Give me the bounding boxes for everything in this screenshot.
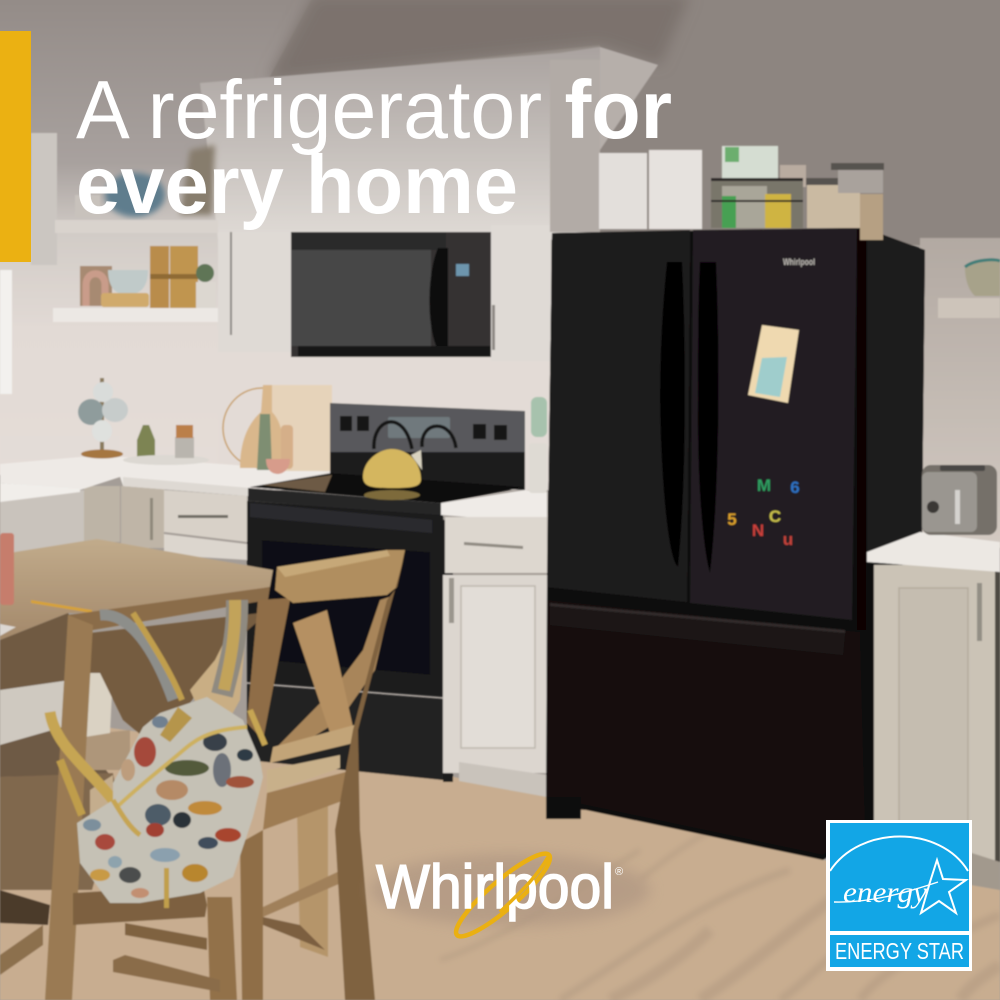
brace A (277, 596, 392, 747)
wall shelf (938, 298, 1000, 318)
paper (0, 624, 16, 636)
stretcher (263, 867, 348, 917)
registered mark: ® (615, 866, 623, 878)
swash (834, 882, 938, 902)
basket (101, 293, 149, 307)
magnets: M (757, 476, 771, 495)
stretchers (125, 923, 207, 950)
right lower cabinet (441, 397, 547, 797)
counter items (78, 378, 332, 474)
dining table (0, 533, 273, 777)
backsplash wall (218, 320, 550, 490)
seat rail (73, 885, 207, 925)
wall ledge (0, 436, 120, 460)
left door (547, 230, 690, 602)
bottom shelf (53, 308, 218, 322)
mug tree (100, 378, 104, 452)
wire basket (711, 180, 803, 228)
right side counter and cabinet (867, 260, 1000, 890)
left stretcher (0, 925, 43, 975)
rainbow (80, 266, 112, 306)
strap left (100, 615, 173, 700)
crown corner (600, 47, 658, 150)
counter left (0, 457, 332, 502)
pepper mill (257, 414, 272, 470)
top shelf (55, 220, 218, 233)
plant (196, 282, 216, 308)
amber glasses (150, 246, 169, 308)
white frame (826, 820, 972, 971)
items on top of refrigerator (599, 146, 884, 240)
right post (247, 598, 290, 740)
right chair (240, 550, 405, 1000)
sloped ceiling and upper wall (268, 0, 1000, 245)
drawer handle (550, 603, 845, 655)
Whirlpool logo (376, 844, 623, 946)
tray (123, 455, 209, 465)
pocket elastic (113, 800, 140, 835)
seat rail (263, 770, 353, 830)
magnets: C (769, 507, 781, 526)
left handle (660, 262, 685, 567)
side panel (867, 230, 925, 560)
window (0, 270, 12, 394)
crown moulding and cabinet body (200, 47, 600, 240)
cooktop (250, 473, 525, 503)
magnets: 5 (727, 510, 737, 529)
oil bottle (137, 425, 155, 458)
left wall (0, 0, 325, 475)
wood floor grain (440, 804, 1000, 1000)
swirl (448, 844, 558, 946)
waist straps (50, 712, 113, 800)
pattern (83, 716, 254, 898)
left post (247, 600, 290, 740)
blue bottom panel (830, 935, 969, 967)
stove (247, 403, 525, 782)
title (76, 63, 672, 231)
crock and utensils (529, 443, 547, 493)
magnets: 6 (790, 478, 800, 497)
magnets: N (752, 521, 764, 540)
brand badge: Whirlpool (783, 257, 815, 267)
wordmark: ENERGY STAR (835, 938, 964, 964)
front right leg (207, 897, 237, 1000)
blue top panel (830, 823, 969, 931)
top rail (68, 587, 270, 630)
right door (690, 228, 857, 620)
note (748, 325, 799, 403)
bowl (965, 261, 1000, 296)
seat band (270, 724, 358, 763)
zipper pull (164, 868, 169, 908)
magnets: u (783, 530, 793, 549)
floor (0, 725, 1000, 1000)
open shelves (53, 145, 218, 322)
cup (0, 533, 14, 605)
ENERGY STAR logo (826, 820, 972, 971)
canisters (807, 180, 860, 228)
storage drawer (247, 684, 452, 781)
cushion (267, 755, 340, 793)
body (77, 697, 263, 903)
refrigerator (546, 228, 925, 860)
left post (45, 615, 93, 1000)
cutting boards (223, 388, 301, 468)
rear seat (0, 773, 118, 890)
freezer drawer (547, 600, 865, 855)
front left leg (240, 830, 263, 1000)
script word: energy (843, 876, 928, 909)
zipper (117, 727, 247, 807)
arc (830, 836, 968, 871)
towel stack (31, 133, 57, 265)
paper towels (599, 153, 647, 229)
title line 2: every home (76, 138, 518, 231)
handle (160, 707, 192, 742)
star (921, 860, 966, 913)
bag (722, 146, 778, 186)
kettle (363, 422, 456, 500)
oven door (247, 501, 443, 697)
yellow accent bar (0, 31, 31, 262)
cabinet (874, 565, 1000, 863)
strap right (222, 600, 237, 695)
rear leg (297, 806, 328, 957)
base cabinets left (0, 486, 247, 560)
right post and leg (335, 553, 405, 1000)
baseboard (874, 822, 1000, 890)
swirl front (500, 857, 548, 912)
magnets (727, 476, 800, 549)
microwave (291, 232, 491, 357)
wordmark: Whirlpool (376, 853, 614, 922)
logo background haze (370, 854, 650, 926)
countertop (867, 532, 1000, 572)
pencil (31, 600, 92, 613)
left chair (0, 587, 290, 1000)
ceiling shadow (268, 0, 690, 80)
right handle (698, 262, 718, 573)
brace B (293, 610, 353, 733)
backpack (50, 600, 265, 908)
cabinet right door (491, 225, 551, 361)
cabinet left door (218, 232, 291, 352)
upper cabinets (200, 47, 658, 361)
feet (546, 797, 581, 819)
utensil crock (175, 437, 194, 458)
back panel (330, 403, 525, 490)
right wall (920, 238, 1000, 548)
body backing (546, 228, 925, 860)
toaster (922, 465, 997, 535)
title line 1: A refrigerator for (76, 63, 672, 156)
blurred shelf items (105, 173, 165, 217)
bowls (108, 270, 148, 294)
back panel and brace (90, 613, 263, 740)
top rail (275, 550, 405, 603)
back gap (85, 673, 113, 737)
